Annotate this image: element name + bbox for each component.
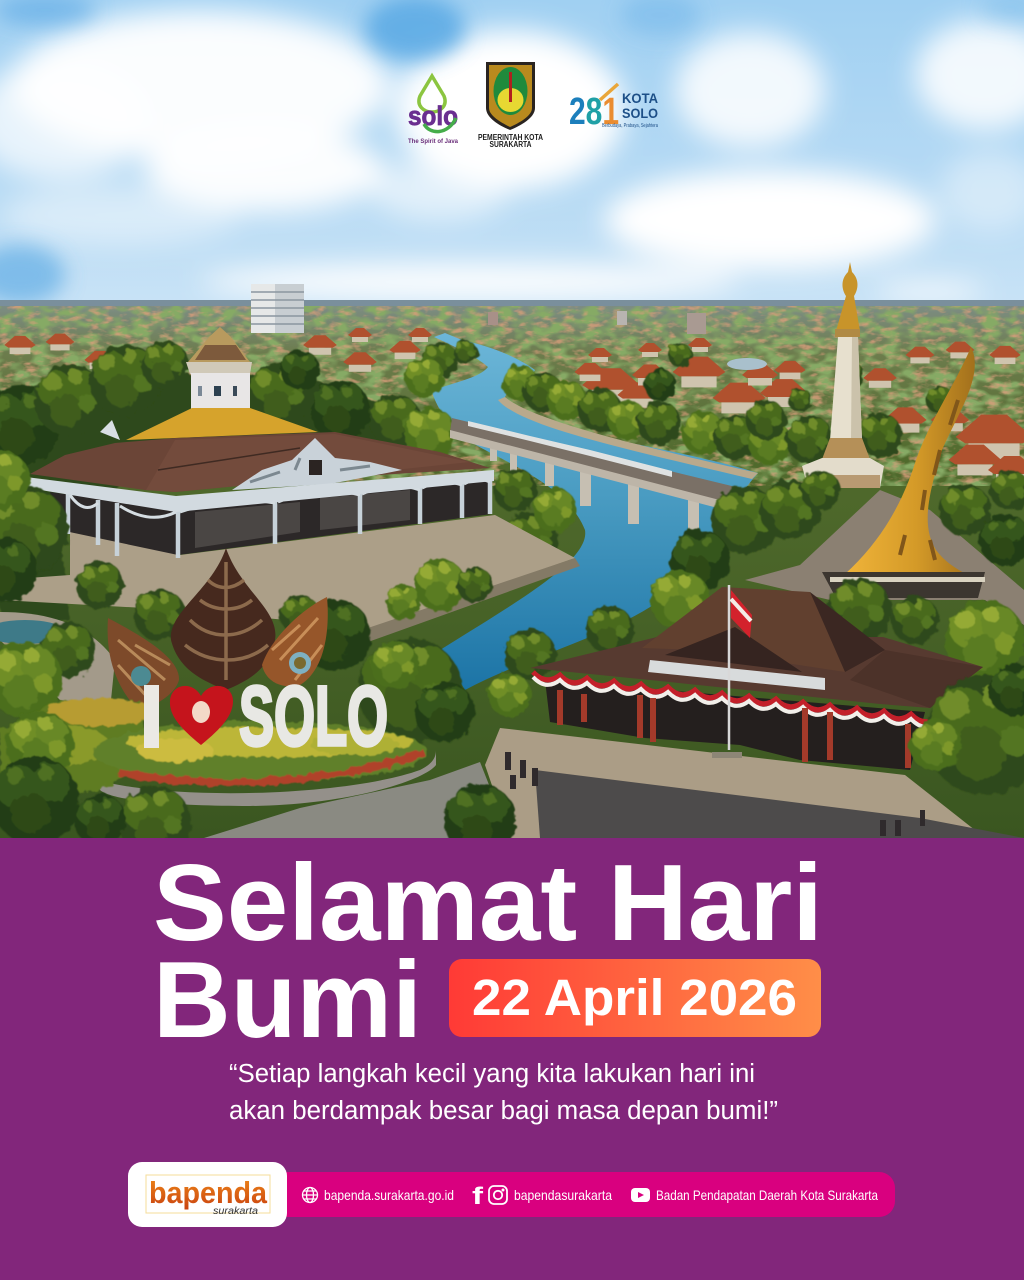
wayang leaf sculptures	[108, 548, 328, 712]
railway bridge with train	[450, 418, 740, 536]
riverbank strip	[498, 397, 758, 479]
icon: facebook: f	[472, 1183, 484, 1210]
white eaves band	[26, 470, 494, 512]
Pendhapi Gede hall	[26, 327, 494, 558]
icon: youtube	[631, 1188, 650, 1202]
logo: Pemerintah Kota Surakarta shield: SURAKARTA	[490, 140, 532, 149]
pendopo floor and interior	[545, 680, 925, 770]
Tugu monument tower	[802, 262, 884, 488]
logo: Solo The Spirit of Java: solo	[408, 101, 458, 131]
golden horn sculpture	[822, 347, 985, 598]
main brown roof	[30, 432, 490, 492]
background trees	[0, 450, 475, 742]
white ornate gable	[232, 438, 402, 490]
bapenda logo card	[128, 1162, 287, 1227]
quote: “Setiap langkah kecil yang kita lakukan hari ini	[229, 1060, 755, 1088]
bapenda logo card: bapenda	[149, 1175, 268, 1210]
sky with clouds	[0, 0, 1024, 310]
distant trees along river	[0, 340, 954, 620]
plaza trees and stone bank	[76, 558, 580, 642]
title: Bumi: Bumi	[153, 939, 422, 1061]
columns	[560, 690, 908, 768]
icon: globe	[302, 1188, 318, 1202]
city landscape	[0, 300, 1024, 840]
foreground plaza and road	[204, 728, 1024, 838]
social handle: bapendasurakarta	[514, 1187, 612, 1203]
quote	[229, 1060, 778, 1125]
bapenda logo card: surakarta	[213, 1206, 258, 1217]
website: bapenda.surakarta.go.id	[324, 1187, 454, 1203]
sign: I love SOLO: SOLO	[239, 669, 388, 763]
logo: 281 Kota Solo	[569, 84, 658, 133]
trees around river and right side	[488, 468, 1024, 717]
balcony balustrade	[648, 660, 825, 690]
logo: 281 Kota Solo: SOLO	[622, 105, 658, 121]
Balaikota pendopo building	[530, 585, 983, 770]
river	[432, 333, 758, 690]
logos row	[408, 62, 658, 149]
I love Solo monument	[0, 450, 475, 806]
icon: instagram	[489, 1186, 507, 1204]
purple panel	[0, 838, 1024, 1280]
red white bunting	[533, 672, 938, 727]
road around monuments	[745, 490, 1024, 625]
hall interior and columns	[50, 479, 492, 558]
title: Selamat Hari: Selamat Hari	[153, 842, 823, 964]
logo: Solo The Spirit of Java: The Spirit of Java	[408, 139, 459, 145]
logo: 281 Kota Solo: KOTA	[622, 90, 658, 106]
central plaza	[0, 515, 575, 632]
city rooftops	[4, 328, 1024, 484]
date badge	[449, 959, 821, 1037]
sign: I love SOLO	[144, 669, 388, 763]
yellow dome roof	[126, 408, 318, 440]
flag	[712, 585, 752, 758]
logo: Pemerintah Kota Surakarta shield	[478, 62, 543, 149]
roofs	[530, 587, 983, 708]
road and water left of monument	[0, 612, 115, 710]
building: white tower block	[251, 284, 706, 334]
logo: Pemerintah Kota Surakarta shield: PEMERINTAH KOTA	[478, 133, 543, 142]
logo: 281 Kota Solo: Berbudaya, Prabaya, Sejahtera	[602, 123, 658, 129]
quote: akan berdampak besar bagi masa depan bumi!”	[229, 1097, 778, 1125]
tower roof and body	[186, 327, 252, 409]
agency name: Badan Pendapatan Daerah Kota Surakarta	[656, 1187, 878, 1203]
flower bed	[0, 698, 436, 806]
logo: 281 Kota Solo: 281	[569, 91, 619, 133]
foreground trees	[0, 664, 1024, 858]
date badge: 22 April 2026	[472, 969, 797, 1026]
footer contact bar	[270, 1172, 895, 1217]
logo: Solo The Spirit of Java	[408, 76, 459, 145]
